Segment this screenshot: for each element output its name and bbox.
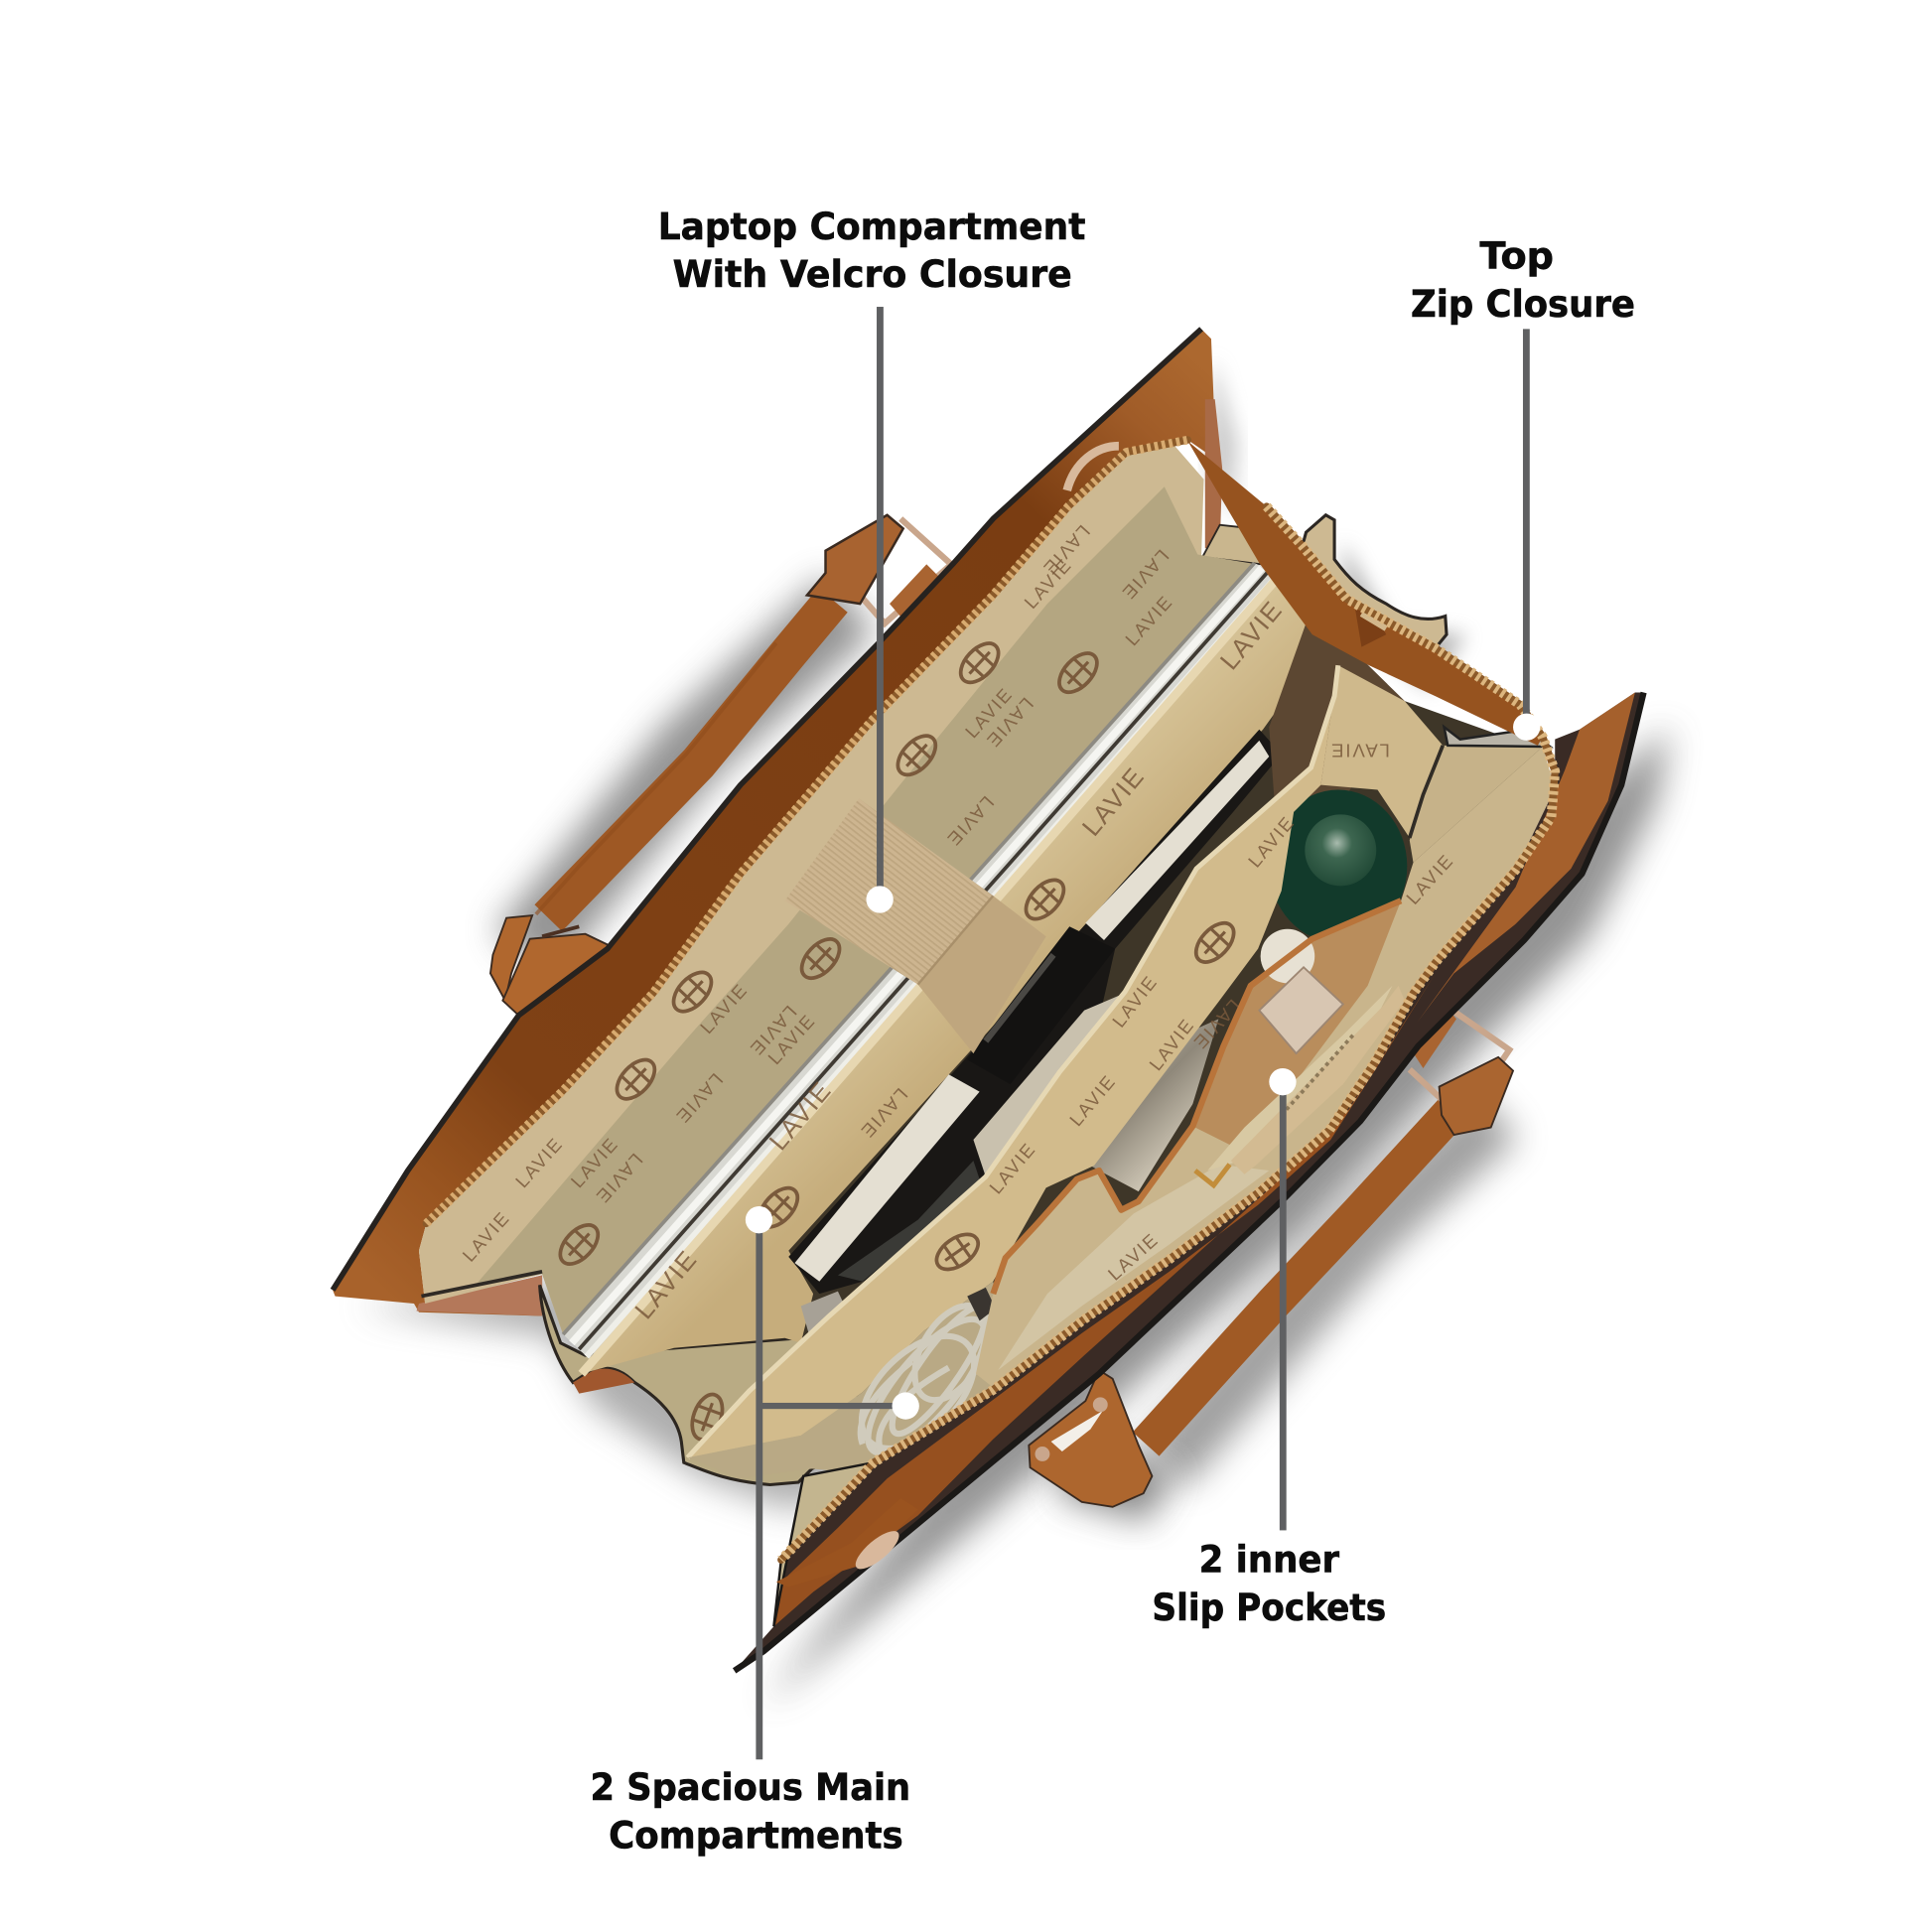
front lining panel: LAVIE <box>1104 1228 1163 1285</box>
label: main compartments <box>590 1765 910 1858</box>
label: top zip closure: Top <box>1480 234 1554 278</box>
lining logos and wordmarks: LAVIE <box>763 1010 819 1068</box>
second divider: LAVIE <box>1244 812 1299 872</box>
lining logos and wordmarks: LAVIE <box>671 1069 727 1128</box>
laptop sleeve divider: LAVIE <box>856 1084 912 1143</box>
right compartment walls <box>1269 617 1550 899</box>
laptop sleeve divider: LAVIE <box>628 1244 703 1324</box>
laptop sleeve divider: LAVIE <box>1214 595 1289 675</box>
handle ring bottom right <box>1410 1008 1509 1119</box>
lining logos and wordmarks: LAVIE <box>819 1020 875 1079</box>
gold ring on back panel <box>1067 446 1119 490</box>
back wall lining <box>419 441 1257 1334</box>
callout: top zip closure <box>1411 234 1635 741</box>
lining logos and wordmarks: LAVIE <box>1118 546 1173 605</box>
laptop sleeve divider: LAVIE <box>1076 760 1151 842</box>
bag back panel leather <box>333 329 1222 1315</box>
front zip teeth <box>781 506 1555 1560</box>
second divider: LAVIE <box>1065 1070 1120 1130</box>
label: inner slip pockets: Slip Pockets <box>1152 1586 1386 1629</box>
label: inner slip pockets <box>1152 1538 1386 1629</box>
front body leather band <box>735 692 1644 1671</box>
lining logos and wordmarks: LAVIE <box>696 979 752 1037</box>
label: main compartments: 2 Spacious Main <box>590 1765 910 1809</box>
cosmetic cubes <box>1011 1190 1115 1305</box>
front body black edge <box>735 692 1644 1671</box>
label: inner slip pockets: 2 inner <box>1199 1538 1340 1582</box>
perfume bottle <box>1259 929 1343 1053</box>
slip pocket interior <box>993 900 1401 1368</box>
callout: laptop compartment <box>658 205 1085 913</box>
lining logos and wordmarks: LAVIE <box>961 683 1017 742</box>
small upper gusset <box>1202 525 1262 564</box>
cable compartment with coiled white cable <box>688 1282 1017 1478</box>
back zip teeth <box>426 440 1187 1223</box>
second divider: LAVIE <box>985 1138 1039 1197</box>
zip pull <box>1195 1165 1230 1185</box>
lining logos and wordmarks: LAVIE <box>746 1002 801 1060</box>
label: top zip closure: Zip Closure <box>1411 282 1635 326</box>
top gusset scallop <box>1303 515 1447 648</box>
callout: inner slip pockets <box>1152 1068 1386 1629</box>
lining logos and wordmarks: LAVIE <box>567 1133 622 1191</box>
lining logos and wordmarks <box>458 521 1176 1271</box>
label: laptop compartment <box>658 205 1085 296</box>
back panel black edge <box>333 329 1201 1290</box>
front lining panel: LAVIE <box>1402 850 1457 908</box>
slip pocket piping <box>993 900 1401 1294</box>
laptop sleeve divider: LAVIE <box>948 948 1005 1007</box>
laptop <box>563 563 1277 1356</box>
handle ring top left <box>840 518 951 623</box>
silver pouch <box>1082 1019 1218 1191</box>
lining logos and wordmarks: LAVIE <box>1121 591 1176 649</box>
lining logos and wordmarks: LAVIE <box>592 1150 647 1208</box>
front lining panel <box>976 747 1555 1387</box>
interior dark base <box>617 573 1547 1462</box>
laptop sleeve divider: LAVIE <box>762 1075 838 1156</box>
second divider <box>688 665 1338 1457</box>
label: top zip closure <box>1411 234 1635 326</box>
second divider: LAVIE <box>1145 1014 1198 1074</box>
end gusset bottom left <box>540 1285 888 1484</box>
second divider: LAVIE <box>1188 996 1245 1054</box>
right compartment walls: LAVIE <box>1329 741 1390 761</box>
lining logos and wordmarks: LAVIE <box>1038 521 1094 580</box>
handle: bottom right <box>1029 1008 1513 1507</box>
handle tabs top left <box>490 515 941 1033</box>
lining logos and wordmarks: LAVIE <box>511 1133 567 1191</box>
lining logos and wordmarks: LAVIE <box>1020 554 1076 613</box>
lining logos and wordmarks: LAVIE <box>982 694 1037 753</box>
lower tan corner <box>773 1462 874 1626</box>
gold smartphone <box>1231 986 1405 1174</box>
second divider: LAVIE <box>1108 971 1162 1032</box>
water bottle <box>1269 790 1407 942</box>
callout: main compartments <box>590 1206 919 1858</box>
lining logos and wordmarks: LAVIE <box>942 792 998 851</box>
label: laptop compartment: With Velcro Closure <box>673 252 1072 296</box>
handle: top left <box>536 518 951 918</box>
inner pocket snap <box>776 1498 918 1587</box>
books and black case <box>788 730 1282 1349</box>
velcro strap <box>785 798 1046 1053</box>
label: laptop compartment: Laptop Compartment <box>658 205 1085 248</box>
laptop sleeve divider <box>582 579 1309 1374</box>
soft drop shadows <box>357 357 1670 1707</box>
lining logos and wordmarks: LAVIE <box>458 1207 514 1266</box>
top zip tape <box>1187 441 1543 746</box>
label: main compartments: Compartments <box>609 1814 903 1858</box>
